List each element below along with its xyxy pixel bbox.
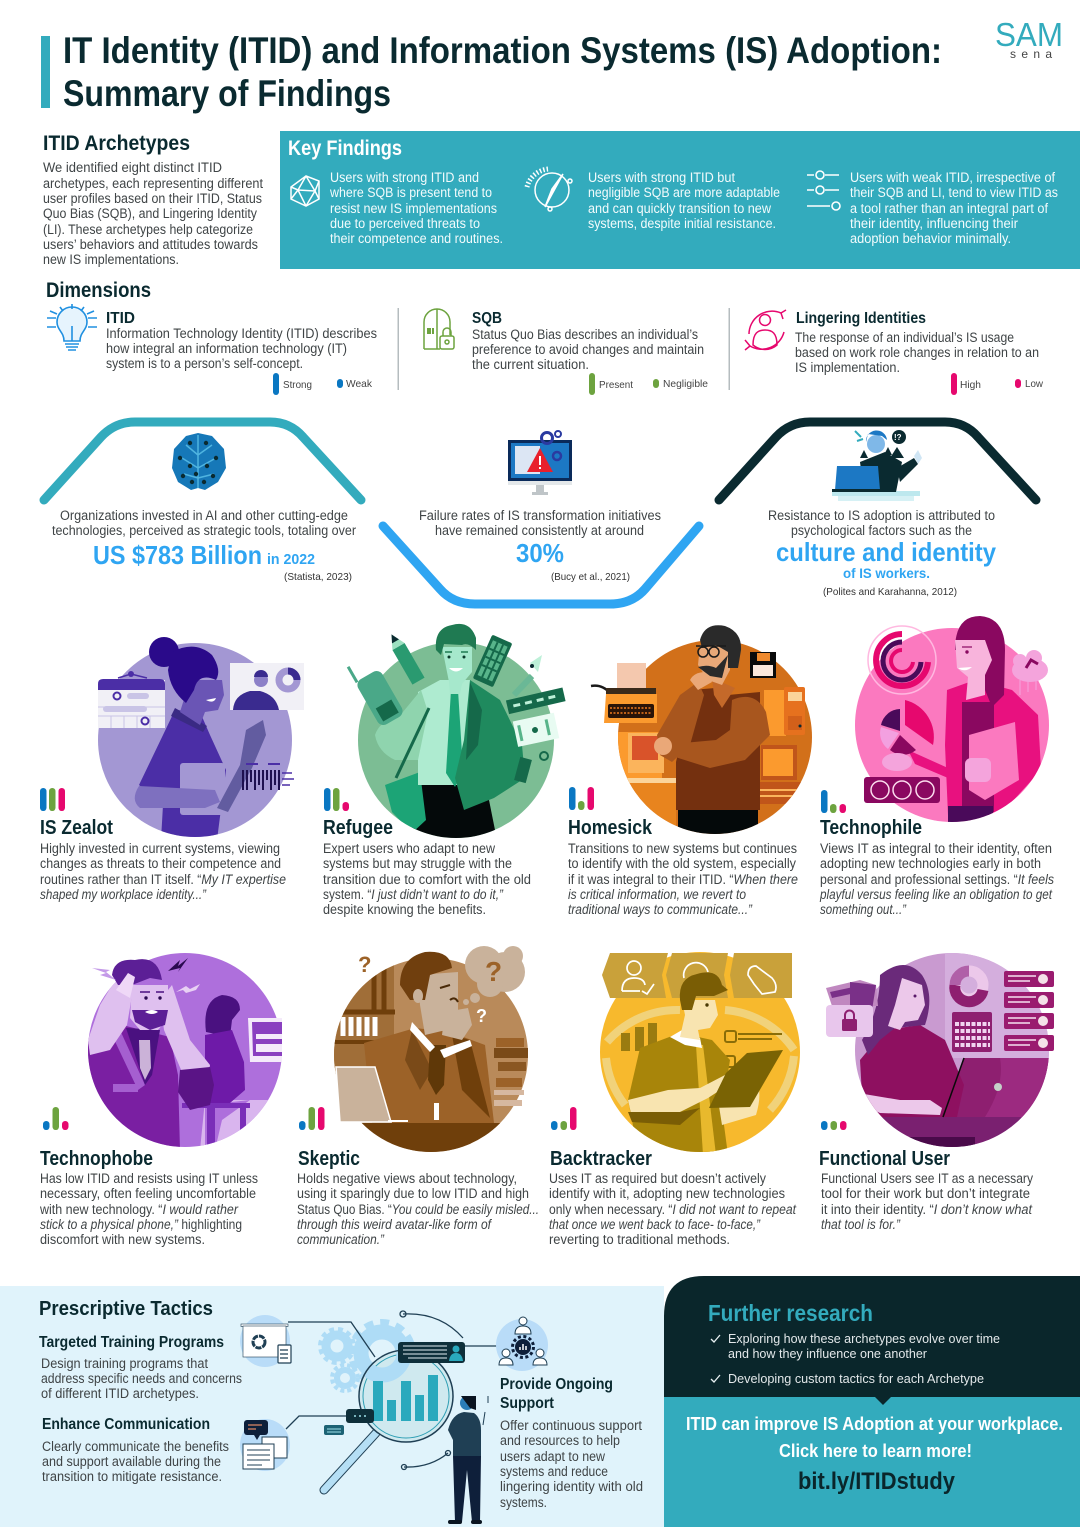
head (436, 624, 476, 694)
panel: ITID Archetypes intro: (LI). These archetypes help categorize (43, 222, 253, 237)
panel: Lingering Identities dimension: based on work role changes in relation to an (795, 345, 1039, 360)
panel: call to action: Click here to learn more! (779, 1441, 972, 1461)
calendar (98, 671, 165, 728)
tactic: Enhance Communication: transition to mitigate resistance. (42, 1469, 222, 1484)
panel: ITID Archetypes intro: new IS implementations. (43, 252, 179, 267)
description: Backtracker: reverting to traditional methods. (549, 1232, 730, 1247)
panel: Key Findings: Key Findings (288, 137, 402, 160)
panel: SQB dimension: preference to avoid changes and maintain (472, 342, 704, 357)
panel: ITID Archetypes intro: user profiles based on their ITID, Status (43, 191, 262, 206)
panel: Further research: Further research (708, 1300, 873, 1326)
ring chart (868, 626, 936, 694)
man standing (448, 1396, 488, 1524)
panel: Lingering Identities dimension (745, 310, 1043, 395)
description: IS Zealot: changes as threats to their competence and (40, 856, 281, 871)
magnifier handle (324, 1433, 376, 1490)
description: Functional User: that tool is for.” (821, 1217, 900, 1232)
tactic: Provide Ongoing Support: lingering identity with old (500, 1479, 643, 1494)
hair and face (955, 616, 1005, 707)
profile card (398, 1342, 465, 1363)
calculator (473, 635, 512, 687)
description: Functional User (821, 1171, 1033, 1232)
archetype: Refugee: Refugee (323, 816, 393, 839)
pencil (385, 631, 425, 685)
text: finding two: and can quickly transition to new (588, 201, 771, 216)
archetype: Backtracker (549, 952, 800, 1247)
description: Technophile (819, 841, 1054, 917)
icon: gem (291, 176, 319, 206)
text: finding one: due to perceived threats to (330, 216, 480, 231)
thought cloud: ? (485, 956, 502, 987)
man body (364, 1022, 494, 1123)
archetype: Backtracker: Backtracker (550, 1147, 652, 1170)
panel: AI investment stat: technologies, perceived as strategic tools, totaling over (52, 523, 356, 538)
laptop (336, 1067, 408, 1122)
mobile phone (346, 654, 405, 728)
bar chart element (243, 763, 294, 790)
panel: SQB dimension: the current situation. (472, 357, 589, 372)
panel: failure rate stat: Failure rates of IS transformation initiatives (419, 508, 661, 523)
ratings: IS Zealot (40, 788, 65, 811)
panel: ITID Archetypes intro: ITID Archetypes (43, 132, 190, 155)
description: Technophobe: stick to a physical phone,” highlighting (40, 1217, 242, 1232)
message bubbles (324, 1409, 374, 1435)
description: IS Zealot: Highly invested in current systems, viewing (40, 841, 280, 856)
frame: dark trapezoid (719, 422, 1036, 500)
description: Skeptic: through this weird avatar-like form of (297, 1217, 492, 1232)
panel: failure rate stat: (Bucy et al., 2021) (551, 571, 630, 583)
thought cloud (463, 946, 525, 1005)
frame: teal trapezoid (44, 422, 361, 500)
illustration: magnifier with analytics (240, 1311, 548, 1524)
tablet (709, 1050, 783, 1108)
panel: SQB dimension: Status Quo Bias describes an individual’s (472, 327, 698, 342)
logo: SAM sena: SAM (995, 16, 1063, 53)
tactic: Provide Ongoing Support: Offer continuous support (500, 1418, 642, 1433)
panel: AI investment stat: in 2022 (267, 551, 315, 568)
lock card (826, 1005, 873, 1037)
archetype: Technophobe: Technophobe (40, 1147, 153, 1170)
panel: failure rate stat: have remained consistently at around (435, 523, 644, 538)
panel: resistance stat (719, 422, 1036, 598)
archetype: Technophile (819, 616, 1054, 917)
description: Homesick: to identify with the old system, especially (568, 856, 796, 871)
panel: resistance stat: (Polites and Karahanna, 2012) (823, 586, 957, 598)
icon: sliders (807, 171, 840, 210)
panel: ITID dimension: Information Technology Identity (ITID) describes (106, 326, 377, 341)
woman head (149, 637, 224, 725)
archetype: Technophobe (39, 953, 290, 1247)
question marks: ? (476, 1006, 487, 1026)
description: Refugee: transition due to comfort with the old (323, 872, 531, 887)
text: finding two: systems, despite initial resistance. (588, 216, 776, 231)
checklist item one (711, 1331, 1000, 1361)
description: Technophobe: with new technology. “I would rather (39, 1202, 238, 1217)
illustration: thinking man with retro devices (591, 625, 812, 845)
title block: IT Identity (ITID) and Information Systems (IS) Adoption: (63, 30, 942, 71)
panel: AI investment stat: (Statista, 2023) (284, 571, 352, 583)
description: Refugee: despite knowing the benefits. (323, 902, 486, 917)
legend: LI (951, 373, 1043, 395)
tactic: Provide Ongoing Support: Support (500, 1395, 555, 1412)
process banner (602, 953, 792, 998)
description: Homesick: if it was integral to their ITID. “When there (568, 872, 798, 887)
checklist (725, 1031, 782, 1067)
trousers (410, 785, 497, 840)
description: Skeptic: communication.” (297, 1232, 384, 1247)
control panel (864, 777, 940, 803)
icon: door with padlock (424, 309, 454, 349)
legend: ITID: Weak (346, 378, 373, 390)
legend: LI: Low (1025, 378, 1043, 390)
toolbar strip (506, 687, 566, 714)
cloud (1012, 650, 1048, 695)
description: Backtracker (549, 1171, 797, 1247)
description: Technophile: something out...” (820, 902, 906, 917)
frame: blue inverted trapezoid (383, 526, 699, 604)
panel: Lingering Identities dimension: Lingering Identities (796, 310, 926, 327)
archetype: Skeptic (297, 946, 539, 1247)
text: finding three: their SQB and LI, tend to view ITID as (850, 185, 1058, 200)
ratings: Functional User (821, 1121, 846, 1130)
legend: ITID: Strong (283, 379, 312, 391)
tablet and hand (908, 722, 1019, 800)
tactic: Targeted Training Programs: Targeted Training Programs (39, 1334, 224, 1351)
panel: Prescriptive Tactics: Prescriptive Tactics (39, 1298, 213, 1320)
lightning marks (92, 958, 200, 993)
text: finding three: adoption behavior minimally. (850, 231, 1011, 246)
typewriter (591, 663, 657, 723)
tactic: Targeted Training Programs: of different ITID archetypes. (41, 1386, 199, 1401)
documents (826, 980, 878, 1010)
floppy disk (750, 652, 776, 678)
question marks (358, 952, 487, 1026)
task cards (1004, 971, 1054, 1051)
legend: SQB: Present (599, 379, 633, 391)
shirt and arm (375, 680, 525, 810)
panel: call to action (664, 1397, 1080, 1527)
legend: ITID (273, 373, 373, 395)
hair and face (862, 965, 929, 1055)
ratings: Homesick (569, 787, 594, 810)
heading: Dimensions: Dimensions (46, 279, 151, 302)
ratings: Skeptic (299, 1107, 324, 1130)
description: Technophile: adopting new technologies early in both (820, 856, 1041, 871)
description: Backtracker: identify with it, adopting new technologies (549, 1186, 785, 1201)
archetype: Homesick (568, 625, 812, 917)
text: finding two: Users with strong ITID but (588, 170, 735, 185)
panel: ITID Archetypes intro: We identified eight distinct ITID (43, 160, 222, 175)
head (680, 972, 728, 1040)
checklist item one: and how they influence one another (728, 1346, 928, 1361)
panel: Key Findings (280, 131, 1080, 269)
man (628, 1033, 730, 1155)
illustration: doubtful man with laptop (334, 946, 529, 1158)
panel: resistance stat: psychological factors such as the (791, 523, 972, 538)
description: Backtracker: only when necessary. “I did not want to repeat (549, 1202, 797, 1217)
tactic: Provide Ongoing Support: and resources to help (500, 1433, 620, 1448)
tablet and arms (135, 720, 266, 815)
text: finding two (588, 170, 780, 231)
description: Skeptic (297, 1171, 539, 1247)
paper card (513, 713, 559, 747)
panel: failure rate stat: 30% (516, 538, 564, 568)
illustration: man with legacy devices (346, 624, 566, 840)
tactic: Provide Ongoing Support: Provide Ongoing (500, 1376, 613, 1393)
title block (41, 30, 942, 114)
tactic: Enhance Communication: Enhance Communication (42, 1416, 210, 1433)
tactic: Provide Ongoing Support (500, 1376, 643, 1510)
pie chart (880, 700, 934, 755)
magnifier lens (358, 1350, 454, 1443)
loop ring (606, 1010, 794, 1110)
panel: ITID Archetypes intro: Quo Bias (SQB), and Lingering Identity (43, 206, 257, 221)
description: Functional User: Functional Users see IT as a necessary (821, 1171, 1033, 1186)
description: Homesick: is critical information, we revert to (568, 887, 746, 902)
description: Homesick (568, 841, 798, 917)
description: Homesick: traditional ways to communicate...” (568, 902, 752, 917)
panel: resistance stat: culture and identity (776, 537, 996, 567)
description: Refugee: systems but may struggle with the (323, 856, 512, 871)
text: finding two: negligible SQB are more adaptable (588, 185, 780, 200)
legend: SQB: Negligible (663, 378, 708, 390)
description: Skeptic: Holds negative views about technology, (297, 1171, 517, 1186)
head and hair (400, 952, 472, 1040)
legend: LI: High (960, 379, 981, 391)
description: Functional User: it into their identity. “I don’t know what (821, 1202, 1033, 1217)
illustration: stressed man with computer user (85, 953, 290, 1150)
archetype: Skeptic: Skeptic (298, 1147, 360, 1170)
archetype: Functional User: Functional User (819, 1147, 950, 1170)
panel: failure rate stat (383, 431, 699, 604)
panel: Lingering Identities dimension: IS implementation. (795, 360, 900, 375)
description: Technophile: personal and professional settings. “It feels (820, 872, 1054, 887)
question marks: ? (358, 952, 371, 977)
panel: AI investment stat: US $783 Billion (93, 540, 262, 570)
archetype: Refugee (323, 624, 566, 917)
description: IS Zealot: routines rather than IT itself. “My IT expertise (40, 872, 286, 887)
icon: presentation board (240, 1315, 291, 1367)
retro office (618, 690, 801, 828)
icon: monitor with warning (508, 431, 572, 495)
connector lines (286, 1311, 499, 1470)
panel: ITID dimension: how integral an information technology (IT) (106, 341, 347, 356)
illustration: woman with data charts (855, 616, 1049, 826)
tactic: Provide Ongoing Support: users adapt to new (500, 1449, 605, 1464)
description: Skeptic: Status Quo Bias. “You could be easily misled... (297, 1202, 539, 1217)
panel: ITID Archetypes intro: users’ behaviors and attitudes towards (43, 237, 258, 252)
tactic: Targeted Training Programs: Design training programs that (41, 1356, 208, 1371)
text: finding three: Users with weak ITID, irrespective of (850, 170, 1055, 185)
icon: compass (527, 169, 572, 211)
panel: AI investment stat (44, 422, 361, 583)
panel: Prescriptive Tactics (0, 1286, 664, 1527)
tactic: Enhance Communication (42, 1416, 229, 1484)
text: finding one: Users with strong ITID and (330, 170, 479, 185)
books (494, 1038, 528, 1106)
computer tower (784, 687, 805, 735)
donut chart (955, 971, 983, 1002)
archetype: Functional User (819, 953, 1055, 1232)
ratings: Refugee (324, 788, 349, 811)
tactic: Provide Ongoing Support: systems and reduce (500, 1464, 608, 1479)
ratings: Technophile (821, 790, 846, 813)
panel: SQB dimension (424, 309, 708, 395)
man body (654, 672, 770, 810)
icon: frustrated person at laptop: !? (894, 433, 902, 442)
title block: Summary of Findings (63, 73, 391, 114)
icon: light bulb (47, 304, 97, 350)
text: finding three (850, 170, 1058, 246)
description: IS Zealot: shaped my workplace identity...” (40, 887, 206, 902)
checklist item one: Exploring how these archetypes evolve over time (728, 1331, 1000, 1346)
archetype: Technophile: Technophile (820, 816, 922, 839)
text: finding three: a tool rather than an integral part of (850, 201, 1048, 216)
woman at monitor (205, 995, 282, 1103)
legend: SQB (589, 373, 708, 395)
icon: team around gear (496, 1317, 548, 1371)
description: Technophile: playful versus feeling like an obligation to get (819, 887, 1053, 902)
description: Refugee: system. “I just didn’t want to do it,” (323, 887, 503, 902)
panel: ITID Archetypes intro: archetypes, each representing different (43, 176, 263, 191)
archetype: IS Zealot (40, 637, 304, 902)
description: Functional User: tool for their work but don’t integrate (821, 1186, 1030, 1201)
description: Skeptic: using it sparingly due to low ITID and high (297, 1186, 529, 1201)
panel: ITID dimension: system is to a person’s self-concept. (106, 356, 303, 371)
description: Technophobe (39, 1171, 258, 1247)
description: Backtracker: Uses IT as required but doesn’t actively (549, 1171, 766, 1186)
tactic: Targeted Training Programs (39, 1334, 242, 1401)
description: Refugee: Expert users who adapt to new (323, 841, 495, 856)
text: finding one: their competence and routines. (330, 231, 503, 246)
panel: resistance stat: of IS workers. (843, 565, 930, 581)
icon: AI brain (172, 433, 226, 490)
panel: AI investment stat: Organizations invested in AI and other cutting-edge (60, 508, 348, 523)
panel: resistance stat: Resistance to IS adoption is attributed to (768, 508, 995, 523)
panel: SQB dimension: SQB (472, 310, 502, 327)
text: finding one: resist new IS implementations (330, 201, 497, 216)
description: Technophobe: necessary, often feeling uncomfortable (40, 1186, 256, 1201)
panel: ITID dimension (47, 304, 377, 395)
tactic: Targeted Training Programs: address specific needs and concerns (41, 1371, 242, 1386)
description: Technophile: Views IT as integral to their identity, often (820, 841, 1052, 856)
ratings: Backtracker (551, 1107, 576, 1130)
video call panel (230, 663, 304, 710)
description: Technophobe: Has low ITID and resists using IT unless (40, 1171, 258, 1186)
tactic: Enhance Communication: Clearly communicate the benefits (42, 1439, 229, 1454)
icon: frustrated person at laptop (832, 430, 922, 501)
bar chart (621, 1023, 657, 1051)
logo: SAM sena: sena (1010, 47, 1052, 61)
checklist item two: Developing custom tactics for each Archetype (728, 1371, 984, 1386)
gears (320, 1322, 413, 1391)
description: Homesick: Transitions to new systems but continues (568, 841, 797, 856)
archetype: IS Zealot: IS Zealot (40, 816, 113, 839)
tactic: Provide Ongoing Support: systems. (500, 1495, 547, 1510)
description: Technophobe: discomfort with new systems. (40, 1232, 205, 1247)
panel: ITID dimension: ITID (106, 310, 135, 327)
illustration: man with tablet and loop (600, 952, 800, 1155)
icon: chat bubbles (240, 1419, 290, 1471)
archetype: Homesick: Homesick (568, 816, 653, 839)
right arm and head (112, 959, 214, 1110)
ratings: Technophobe (43, 1107, 68, 1130)
text: finding one (329, 170, 503, 246)
illustration: woman at laptop with tasks (826, 953, 1055, 1149)
description: Refugee (323, 841, 531, 917)
illustration: woman with calendar and video call (98, 637, 304, 840)
description: IS Zealot (40, 841, 286, 902)
panel: call to action: bit.ly/ITIDstudy (798, 1468, 956, 1495)
panel: Further research (664, 1276, 1080, 1397)
text: finding three: their identity, influencing their (850, 216, 1018, 231)
icon: person in cycle arrows (745, 310, 786, 350)
bag (385, 772, 426, 833)
text: finding one: where SQB is present tend to (329, 185, 492, 200)
panel: Lingering Identities dimension: The response of an individual’s IS usage (795, 330, 1014, 345)
tactic: Enhance Communication: and support available during the (42, 1454, 221, 1469)
man head (696, 625, 741, 685)
panel: ITID Archetypes intro (43, 132, 263, 267)
calendar (952, 1012, 992, 1052)
pen tool (514, 655, 542, 695)
description: Backtracker: that once we went back to face- to-face,” (549, 1217, 760, 1232)
